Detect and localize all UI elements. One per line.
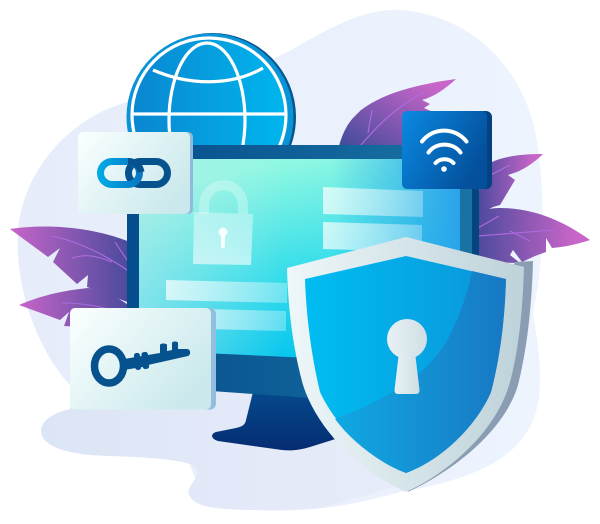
card: wifi icon xyxy=(402,111,492,189)
leaf: left lower xyxy=(19,288,130,330)
card: key icon xyxy=(70,308,216,410)
monitor screen xyxy=(139,159,460,365)
screen form bars xyxy=(166,187,423,331)
monitor xyxy=(127,145,479,450)
screen padlock xyxy=(193,185,253,265)
leaf: right upper xyxy=(478,154,543,215)
monitor body xyxy=(127,145,479,410)
shield shading xyxy=(335,271,506,473)
icon: key xyxy=(94,342,190,383)
shield face xyxy=(305,256,506,473)
globe icon xyxy=(126,33,296,145)
leaf: top right xyxy=(339,79,456,150)
keyhole xyxy=(387,319,427,394)
card: link icon xyxy=(78,132,193,214)
icon: wifi xyxy=(422,131,466,170)
shield xyxy=(287,237,533,492)
shield rim xyxy=(287,237,524,492)
ground shadow xyxy=(41,380,420,510)
monitor stand xyxy=(212,392,345,450)
leaf: right lower xyxy=(476,208,590,263)
icon: chain link xyxy=(100,162,168,184)
shield side xyxy=(408,261,533,492)
leaf: left upper xyxy=(10,227,130,303)
